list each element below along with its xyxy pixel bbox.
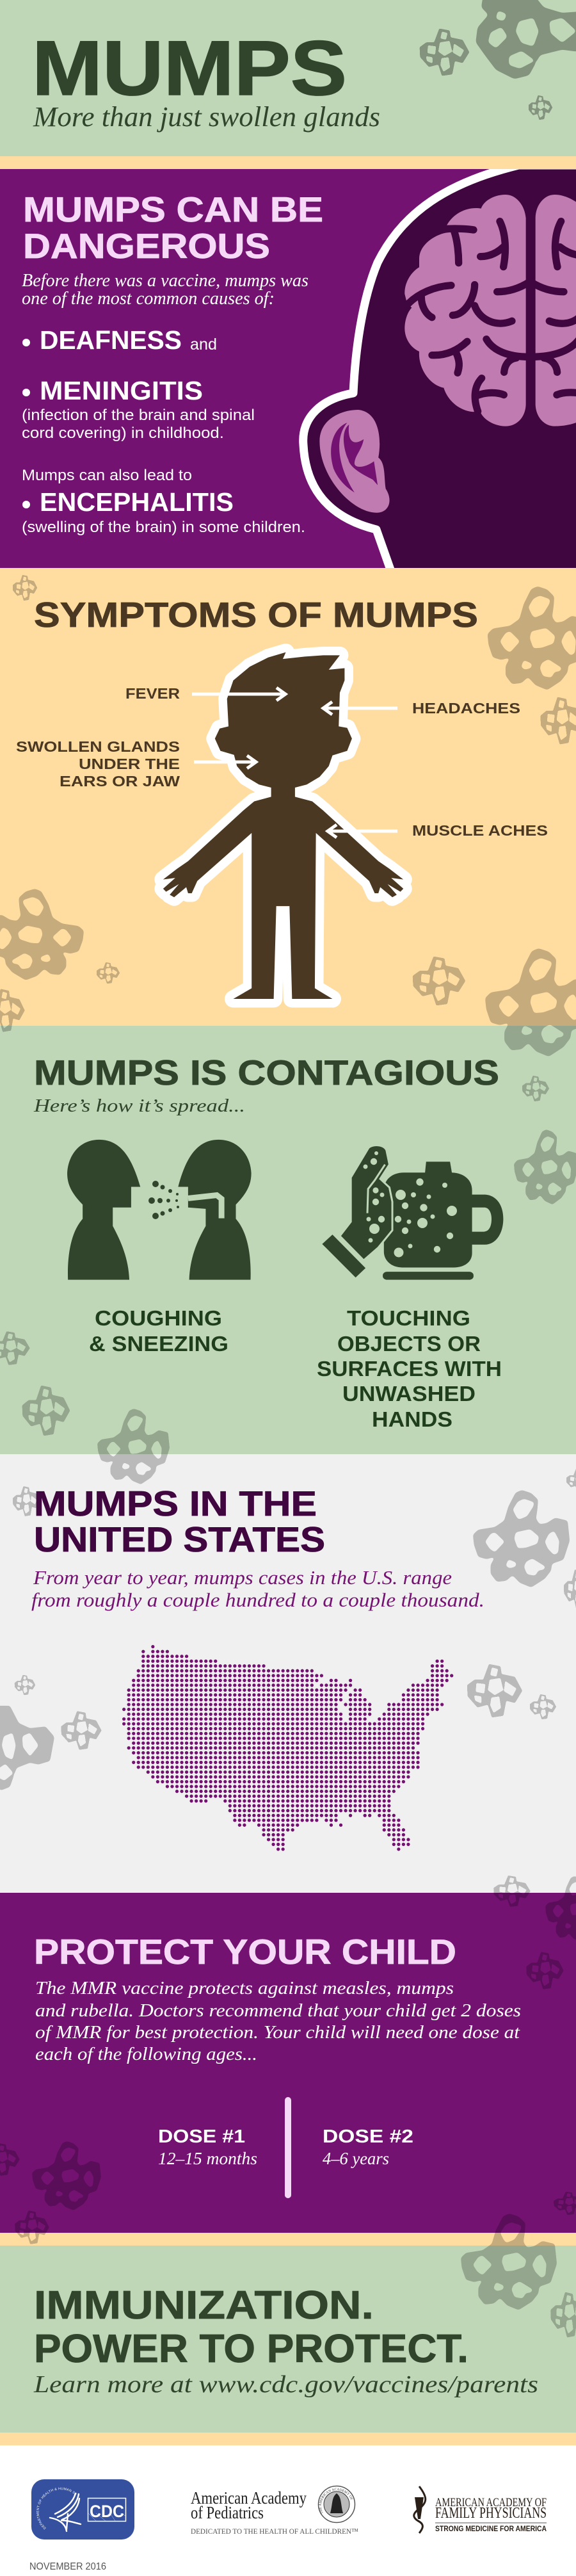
virus particles: contagious panel bbox=[0, 1076, 576, 1484]
logo: HHS and CDC: DEPARTMENT OF HEALTH & HUMAN SERVICES USA bbox=[36, 2487, 77, 2529]
section background: contagious panel bbox=[0, 1026, 576, 1454]
logo: American Academy of Pediatrics: THE AMERICAN ACADEMY OF bbox=[319, 2488, 353, 2514]
logo: American Academy of Family Physicians bbox=[414, 2486, 547, 2533]
list item: encephalitis: ENCEPHALITIS bbox=[40, 487, 234, 517]
heading: mumps in the united states: UNITED STATES bbox=[34, 1519, 325, 1559]
text block: before the vaccine: Before there was a vaccine, mumps was bbox=[22, 271, 308, 291]
dose 1: 12–15 months bbox=[158, 2149, 257, 2168]
list item: meningitis: (infection of the brain and spinal bbox=[22, 407, 255, 424]
section background: header bbox=[0, 0, 576, 156]
heading: mumps can be dangerous: DANGEROUS bbox=[23, 226, 270, 266]
arrow: fever bbox=[192, 688, 285, 701]
divider between doses bbox=[285, 2097, 291, 2198]
logo: American Academy of Pediatrics bbox=[191, 2486, 358, 2536]
illustration: head with brain and ear bbox=[303, 165, 576, 573]
text block: MMR vaccine: of MMR for best protection. Your child will need one dose at bbox=[35, 2022, 520, 2043]
heading: mumps is contagious: MUMPS IS CONTAGIOUS bbox=[34, 1053, 499, 1092]
heading: symptoms of mumps: SYMPTOMS OF MUMPS bbox=[34, 595, 478, 635]
cream band under header bbox=[0, 156, 576, 169]
heading: mumps can be dangerous bbox=[23, 190, 323, 266]
illustration: child silhouette bbox=[163, 652, 403, 999]
label: touching objects: TOUCHING bbox=[347, 1306, 470, 1330]
icon: hand touching mug bbox=[322, 1146, 503, 1280]
date: NOVEMBER 2016 bbox=[29, 2561, 106, 2572]
logo: HHS and CDC: CDC bbox=[90, 2502, 124, 2521]
list item: meningitis: cord covering) in childhood. bbox=[22, 425, 224, 442]
text block: before the vaccine: one of the most common causes of: bbox=[22, 289, 275, 309]
logo: HHS and CDC bbox=[31, 2479, 134, 2540]
section background: symptoms panel bbox=[0, 568, 576, 1026]
icon: two people, coughing and sneezing bbox=[67, 1140, 252, 1280]
list item: encephalitis: (swelling of the brain) in some children. bbox=[22, 519, 305, 536]
text: learn more link: Learn more at www.cdc.gov/vaccines/parents bbox=[33, 2371, 538, 2398]
cream band under protect panel bbox=[0, 2233, 576, 2246]
logo: American Academy of Family Physicians: STRONG MEDICINE FOR AMERICA bbox=[435, 2524, 547, 2533]
heading: mumps in the united states: MUMPS IN THE bbox=[34, 1484, 317, 1523]
subheading: how it is spread: Here’s how it’s spread... bbox=[33, 1096, 245, 1116]
label: touching objects: HANDS bbox=[372, 1407, 452, 1431]
list item: meningitis: MENINGITIS bbox=[40, 376, 203, 405]
text block: MMR vaccine: and rubella. Doctors recommend that your child get 2 doses bbox=[35, 2000, 521, 2021]
logo: American Academy of Pediatrics: DEDICATED TO THE HEALTH OF ALL CHILDREN™ bbox=[191, 2527, 358, 2536]
heading: mumps in the united states bbox=[34, 1484, 325, 1559]
virus particles: United States panel bbox=[0, 1469, 576, 1941]
heading: immunization, power to protect bbox=[34, 2283, 468, 2371]
label: touching objects: OBJECTS OR bbox=[337, 1332, 481, 1356]
section background: call to action panel bbox=[0, 2246, 576, 2433]
text block: before the vaccine bbox=[22, 271, 308, 309]
heading: immunization, power to protect: POWER TO PROTECT. bbox=[34, 2327, 468, 2371]
list item: deafness: and bbox=[190, 336, 217, 353]
dose 1 bbox=[158, 2126, 257, 2168]
label: touching objects: UNWASHED bbox=[342, 1382, 476, 1405]
virus particles: protect panel bbox=[0, 1952, 576, 2338]
section background: dangerous panel bbox=[0, 169, 576, 568]
label: swollen glands bbox=[16, 738, 180, 790]
text block: case range bbox=[31, 1566, 484, 1611]
logo: American Academy of Pediatrics: of Pediatrics bbox=[191, 2503, 264, 2522]
label: muscle aches: MUSCLE ACHES bbox=[412, 822, 548, 839]
text block: case range: from roughly a couple hundred to a couple thousand. bbox=[31, 1589, 484, 1611]
cream band above footer bbox=[0, 2433, 576, 2445]
arrow: swollen glands bbox=[194, 756, 256, 768]
dot map of the United States bbox=[124, 1647, 452, 1849]
dose 1: DOSE #1 bbox=[158, 2126, 245, 2147]
heading: immunization, power to protect: IMMUNIZATION. bbox=[34, 2283, 374, 2328]
list item: deafness: DEAFNESS bbox=[40, 325, 182, 355]
label: swollen glands: UNDER THE bbox=[79, 756, 180, 772]
arrow: headaches bbox=[323, 702, 397, 715]
text block: MMR vaccine: each of the following ages... bbox=[35, 2044, 257, 2064]
label: coughing and sneezing bbox=[89, 1306, 228, 1356]
heading: protect your child: PROTECT YOUR CHILD bbox=[34, 1932, 456, 1972]
arrow: muscle aches bbox=[328, 825, 397, 838]
ear bbox=[319, 410, 390, 513]
list item: meningitis bbox=[22, 376, 255, 442]
label: touching objects bbox=[317, 1306, 502, 1431]
label: headaches: HEADACHES bbox=[412, 700, 520, 717]
list item: encephalitis bbox=[22, 487, 305, 536]
dose 2: 4–6 years bbox=[323, 2149, 389, 2168]
label: swollen glands: SWOLLEN GLANDS bbox=[16, 738, 180, 755]
section background: United States panel bbox=[0, 1454, 576, 1893]
brain bbox=[404, 195, 576, 426]
text block: MMR vaccine bbox=[35, 1978, 521, 2064]
text: mumps can also lead to: Mumps can also lead to bbox=[22, 467, 192, 484]
virus particles: symptoms panel bbox=[0, 575, 576, 1057]
dose 2: DOSE #2 bbox=[323, 2126, 413, 2147]
title: MUMPS bbox=[32, 24, 347, 111]
label: touching objects: SURFACES WITH bbox=[317, 1357, 502, 1381]
heading: mumps can be dangerous: MUMPS CAN BE bbox=[23, 190, 323, 229]
label: swollen glands: EARS OR JAW bbox=[60, 773, 180, 790]
label: coughing and sneezing: & SNEEZING bbox=[89, 1332, 228, 1356]
logo: American Academy of Pediatrics: American Academy bbox=[191, 2488, 307, 2507]
text block: case range: From year to year, mumps cases in the U.S. range bbox=[33, 1566, 452, 1589]
section background: protect panel bbox=[0, 1893, 576, 2233]
text block: MMR vaccine: The MMR vaccine protects against measles, mumps bbox=[35, 1978, 454, 1998]
subtitle: More than just swollen glands bbox=[33, 101, 380, 133]
label: coughing and sneezing: COUGHING bbox=[95, 1306, 222, 1330]
virus particles: header bbox=[420, 0, 576, 120]
dose 2 bbox=[323, 2126, 413, 2168]
label: fever: FEVER bbox=[125, 685, 180, 702]
head silhouette bbox=[303, 165, 576, 573]
